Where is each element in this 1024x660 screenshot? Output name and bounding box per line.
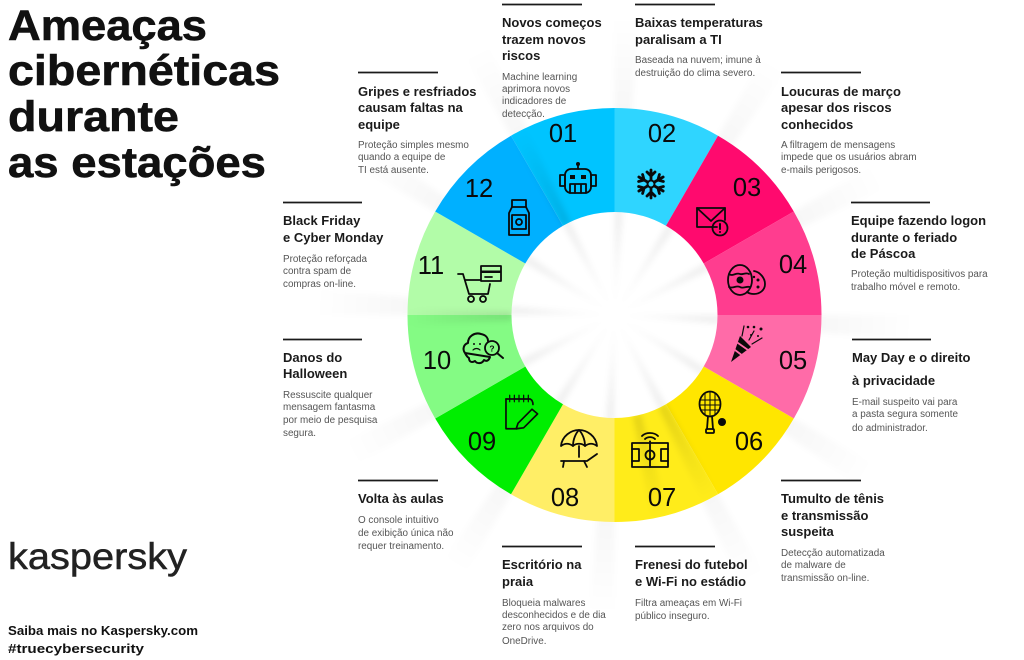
text block: 05: a pasta segura somente	[852, 409, 958, 420]
segment 11	[407, 212, 525, 315]
text block: 05: May Day e o direito	[852, 350, 971, 365]
text block: 11: contra spam de	[283, 266, 352, 277]
text block: 06	[781, 480, 885, 584]
text block: 11: compras on-line.	[283, 279, 356, 290]
text block: 10	[283, 340, 378, 439]
text block: 02: paralisam a TI	[635, 32, 722, 47]
icon: beach umbrella and lounger	[561, 430, 597, 467]
text block: 08	[502, 546, 606, 647]
segment numbers: 08	[551, 484, 579, 512]
text block: 01: Novos começos	[502, 15, 602, 30]
text block: 04	[851, 202, 988, 293]
text block: 06: suspeita	[781, 524, 835, 539]
text block: 04: trabalho móvel e remoto.	[851, 282, 960, 293]
segment 07	[614, 404, 718, 522]
text block: 01: trazem novos	[502, 32, 586, 47]
text block: 03: e-mails perigosos.	[781, 165, 861, 176]
text block: 11: Black Friday	[283, 213, 361, 228]
text block: 04: Equipe fazendo logon	[851, 213, 986, 228]
text block: 10: por meio de pesquisa	[283, 415, 378, 426]
segment numbers: 03	[733, 174, 761, 202]
text block: 02: Baixas temperaturas	[635, 15, 763, 30]
icon: ghost with magnifier	[464, 333, 503, 363]
text block: 10: mensagem fantasma	[283, 402, 376, 413]
text block: 12	[358, 72, 476, 176]
text block: 01: aprimora novos	[502, 84, 570, 95]
segment 10	[408, 315, 525, 418]
text block: 09: requer treinamento.	[358, 541, 444, 552]
text block: 09	[358, 480, 454, 552]
segment 03	[666, 136, 794, 264]
title: Ameaças	[8, 2, 207, 50]
text block: 03: conhecidos	[781, 117, 853, 132]
segment numbers: 04	[779, 251, 807, 279]
title: as estações	[8, 139, 266, 187]
icon: robot	[560, 162, 596, 193]
donut wheel	[407, 108, 822, 522]
icon: ghost with magnifier: ?	[489, 344, 495, 354]
icon: tennis racket	[700, 392, 726, 433]
text block: 03	[781, 72, 917, 176]
icon: party popper	[731, 326, 762, 362]
text block: 10: Ressuscite qualquer	[283, 390, 373, 401]
icon: snowflake	[637, 170, 665, 198]
text block: 04: Proteção multidispositivos para	[851, 269, 988, 280]
icon: easter eggs	[728, 265, 765, 295]
text block: 07	[635, 546, 748, 622]
segment 08	[511, 404, 614, 522]
text block: 10: Halloween	[283, 366, 347, 381]
segment numbers: 06	[735, 428, 763, 456]
text block: 11	[283, 202, 384, 290]
text block: 04: de Páscoa	[851, 246, 916, 261]
icon: envelope with warning	[697, 208, 728, 236]
text block: 01: riscos	[502, 48, 540, 63]
text block: 09: Volta às aulas	[358, 491, 444, 506]
text block: 05: à privacidade	[852, 373, 935, 388]
icon: medicine bottle	[509, 200, 529, 235]
text block: 03: A filtragem de mensagens	[781, 140, 895, 151]
text block: 05	[852, 340, 971, 434]
segment numbers: 05	[779, 347, 807, 375]
text block: 03: impede que os usuários abram	[781, 152, 917, 163]
text block: 06: Tumulto de tênis	[781, 491, 884, 506]
text block: 12: quando a equipe de	[358, 152, 446, 163]
icon: shopping cart and card	[458, 266, 501, 302]
text block: 02: Baseada na nuvem; imune à	[635, 55, 761, 66]
text block: 01: detecção.	[502, 109, 545, 120]
text block: 10: Danos do	[283, 350, 342, 365]
text block: 12: Gripes e resfriados	[358, 84, 476, 99]
text block: 08: praia	[502, 574, 534, 589]
text block: 10: segura.	[283, 428, 316, 439]
text block: 05: E-mail suspeito vai para	[852, 397, 958, 408]
footer links: #truecybersecurity	[8, 641, 145, 656]
segment numbers: 01	[549, 120, 577, 148]
segment numbers: 09	[468, 428, 496, 456]
segment numbers: 02	[648, 120, 676, 148]
footer links	[8, 623, 198, 656]
text block: 11: Proteção reforçada	[283, 254, 367, 265]
title	[8, 2, 280, 187]
text block: 12: equipe	[358, 117, 400, 132]
footer links: Saiba mais no Kaspersky.com	[8, 623, 198, 638]
segment numbers: 10	[423, 347, 451, 375]
icon: stadium with wifi	[632, 433, 668, 467]
segment 12	[435, 136, 563, 264]
text block: 06: e transmissão	[781, 508, 868, 523]
text block: 11: e Cyber Monday	[283, 230, 384, 245]
segment 06	[666, 366, 794, 494]
text block: 03: apesar dos riscos	[781, 100, 892, 115]
text block: 01: indicadores de	[502, 96, 567, 107]
text block: 01: Machine learning	[502, 72, 577, 83]
text block: 12: TI está ausente.	[358, 165, 429, 176]
text block: 06: transmissão on-line.	[781, 573, 869, 584]
text block: 02: destruição do clima severo.	[635, 68, 755, 79]
segment numbers	[418, 120, 807, 512]
text block: 08: Bloqueia malwares	[502, 598, 585, 609]
segment 05	[704, 315, 822, 418]
title: durante	[8, 93, 179, 141]
text block: 12: causam faltas na	[358, 100, 464, 115]
segment numbers: 12	[465, 175, 493, 203]
text block: 09: O console intuitivo	[358, 515, 439, 526]
logo: kaspersky: kaspersky	[8, 536, 188, 577]
text block: 08: desconhecidos e de dia	[502, 610, 606, 621]
text block: 04: durante o feriado	[851, 230, 957, 245]
icon: notepad and pencil	[506, 395, 538, 429]
text block: 07: e Wi-Fi no estádio	[635, 574, 746, 589]
segment 01	[511, 108, 614, 226]
text block: 02	[635, 4, 763, 79]
text block: 08: Escritório na	[502, 557, 582, 572]
segment 04	[704, 212, 822, 315]
text block: 09: de exibição única não	[358, 528, 454, 539]
text block: 08: zero nos arquivos do	[502, 622, 594, 633]
segment numbers: 11	[418, 252, 444, 280]
text block: 12: Proteção simples mesmo	[358, 140, 469, 151]
text block: 06: de malware de	[781, 560, 846, 571]
text block: 05: do administrador.	[852, 423, 928, 434]
segment 02	[614, 108, 718, 226]
text block: 07: Frenesi do futebol	[635, 557, 748, 572]
segment 09	[435, 366, 563, 494]
title: cibernéticas	[8, 47, 280, 95]
text block: 08: OneDrive.	[502, 636, 546, 647]
text block: 01	[502, 4, 602, 120]
text block: 03: Loucuras de março	[781, 84, 901, 99]
text block: 06: Detecção automatizada	[781, 548, 885, 559]
text block: 07: Filtra ameaças em Wi-Fi	[635, 598, 742, 609]
segment numbers: 07	[648, 484, 676, 512]
text block: 07: público inseguro.	[635, 611, 710, 622]
